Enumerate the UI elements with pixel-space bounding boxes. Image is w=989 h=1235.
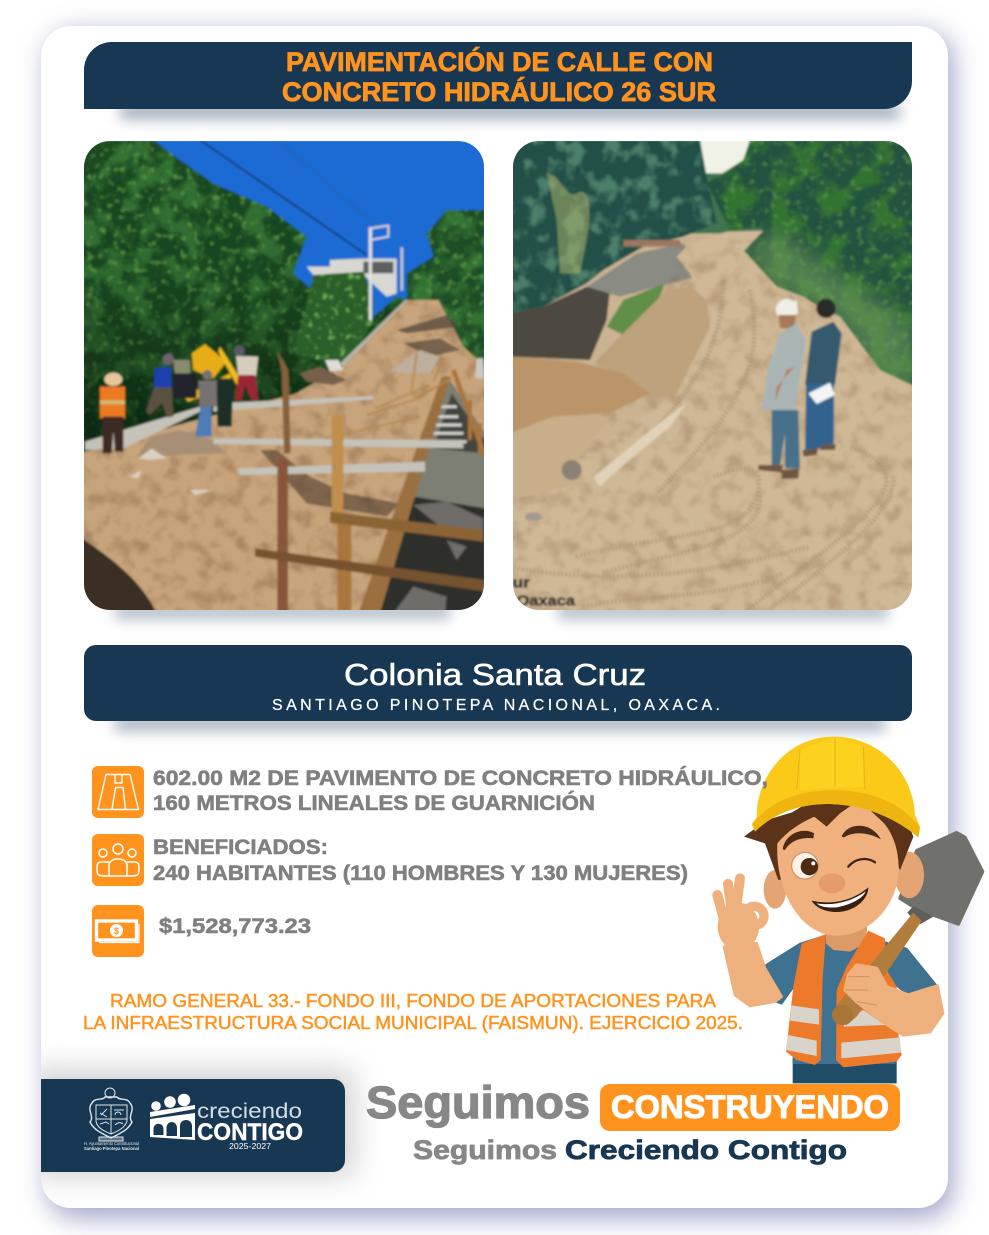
crest caption: H. Ayuntamiento Constitucional <box>84 1141 139 1146</box>
mixer <box>192 344 227 378</box>
ok hand <box>717 878 764 951</box>
logo panel <box>30 1068 355 1178</box>
hair fringe <box>768 802 857 845</box>
shovel blade <box>900 833 983 924</box>
worker blue <box>163 354 174 365</box>
trees <box>80 140 413 460</box>
title text: PAVIMENTACIÓN DE CALLE CON <box>286 46 713 77</box>
trees left <box>510 140 723 317</box>
photo: workers with concrete mixer on road formwork <box>80 140 487 613</box>
neck <box>826 927 867 952</box>
rubble <box>137 430 227 457</box>
icon: money: $ <box>114 926 119 936</box>
man in jacket <box>816 299 836 318</box>
tagline <box>413 1135 847 1165</box>
left arm <box>724 943 782 1006</box>
title text: CONCRETO HIDRÁULICO 26 SUR <box>282 76 716 107</box>
slogan word: Seguimos <box>366 1077 590 1128</box>
smile <box>812 887 868 912</box>
nose <box>819 873 845 893</box>
winking eye <box>848 859 875 867</box>
tagline: Seguimos <box>413 1135 557 1165</box>
title text <box>282 46 716 107</box>
slogan <box>366 1077 900 1165</box>
funding source note: RAMO GENERAL 33.- FONDO III, FONDO DE APORTACIONES PARA <box>110 991 716 1011</box>
worker right <box>234 345 245 356</box>
location subtitle: SANTIAGO PINOTEPA NACIONAL, OAXACA. <box>272 697 720 714</box>
beneficiaries text: BENEFICIADOS: <box>153 835 328 859</box>
icon: road <box>92 766 144 818</box>
man with cap <box>793 299 800 314</box>
right hand <box>845 965 943 1035</box>
creciendo contigo logo: 2025-2027 <box>229 1142 272 1151</box>
formwork and concrete <box>415 380 485 510</box>
amount: $1,528,773.23 <box>159 914 311 938</box>
road figures text: 160 METROS LINEALES DE GUARNICIÓN <box>153 790 595 815</box>
planks <box>85 396 463 475</box>
eyebrows <box>783 831 814 850</box>
crest caption: Santiago Pinotepa Nacional <box>84 1146 139 1151</box>
creciendo contigo logo: CONTIGO <box>197 1119 303 1146</box>
photo caption <box>513 578 576 608</box>
location banner <box>84 645 912 731</box>
vest reflective stripes <box>786 1005 901 1058</box>
hard hat <box>752 737 920 837</box>
ears <box>764 870 786 909</box>
shirt <box>764 935 937 1063</box>
vest <box>786 934 826 1065</box>
hair back <box>744 800 913 880</box>
municipal crest <box>90 1088 132 1141</box>
tracks <box>510 280 893 613</box>
open eye <box>792 852 818 879</box>
location name: Colonia Santa Cruz <box>344 657 646 692</box>
creciendo contigo logo: creciendo <box>197 1100 302 1123</box>
dirt mound <box>597 287 710 400</box>
orange pill <box>600 1084 900 1131</box>
mascot: construction worker with shovel <box>717 737 983 1083</box>
ground <box>80 297 487 613</box>
photo caption: Oaxaca <box>517 594 576 610</box>
worker with orange vest <box>104 373 122 386</box>
beneficiaries text <box>153 835 688 885</box>
funding source note: LA INFRAESTRUCTURA SOCIAL MUNICIPAL (FAISMUN). EJERCICIO 2025. <box>83 1013 743 1033</box>
project details <box>92 765 768 957</box>
tagline: Creciendo Contigo <box>565 1135 847 1165</box>
photo caption: ur <box>513 575 530 591</box>
icon: people <box>92 834 144 886</box>
icon: money <box>92 905 144 957</box>
photo shadows <box>115 604 888 619</box>
house <box>307 259 397 297</box>
creciendo contigo logo <box>150 1094 303 1151</box>
pants <box>793 1058 897 1083</box>
orange pill: CONSTRUYENDO <box>611 1089 889 1125</box>
scrub and gray road <box>510 287 610 360</box>
road <box>676 228 912 386</box>
photo: two men inspecting dirt road <box>510 140 917 613</box>
trees right <box>707 140 917 388</box>
title banner <box>84 42 912 119</box>
face <box>777 804 899 936</box>
distant trees <box>687 173 767 233</box>
crest caption <box>84 1141 139 1151</box>
road figures text: 602.00 M2 DE PAVIMENTO DE CONCRETO HIDRÁULICO, <box>153 765 768 790</box>
road figures text <box>153 765 768 815</box>
shovel handle <box>832 913 922 1025</box>
funding source note <box>83 991 743 1033</box>
beneficiaries text: 240 HABITANTES (110 HOMBRES Y 130 MUJERES) <box>153 861 688 885</box>
worker gray <box>202 370 212 380</box>
posts <box>277 458 288 613</box>
